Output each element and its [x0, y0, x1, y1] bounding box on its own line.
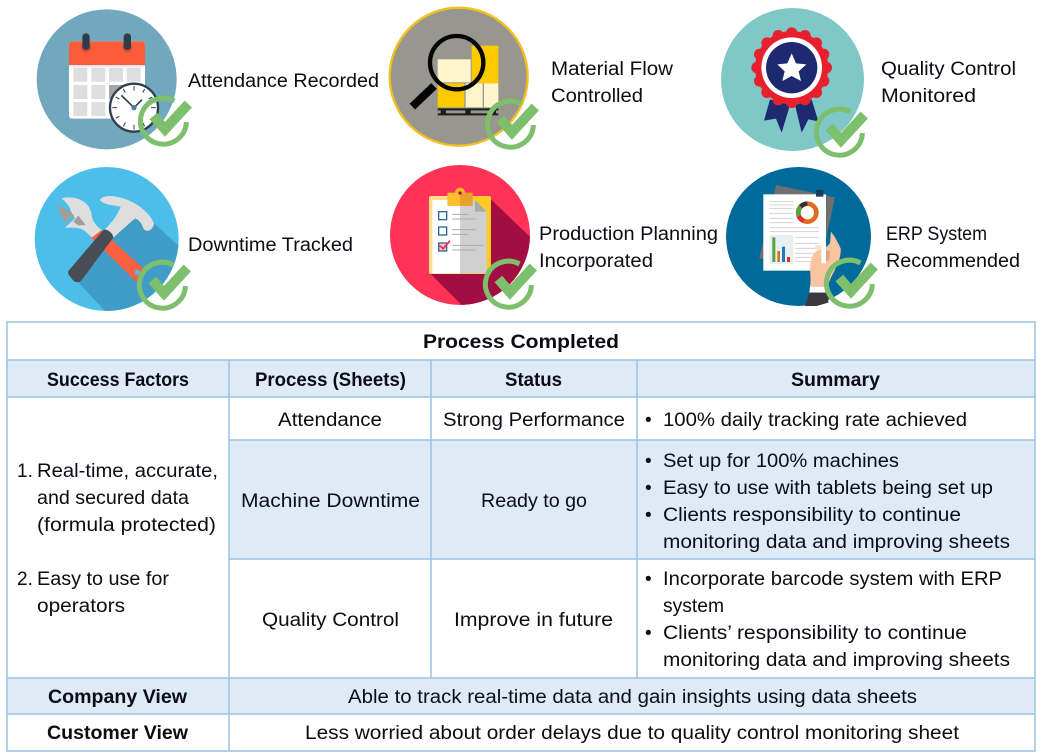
- icon: check mark material: [487, 101, 535, 147]
- label: material flow controlled: [551, 59, 673, 107]
- row: attendance: Attendance: [278, 410, 382, 431]
- row: machine downtime: •: [645, 451, 652, 472]
- row: attendance: 100% daily tracking rate achieved: [663, 410, 967, 431]
- table title: Process Completed: [423, 332, 619, 353]
- row: customer view: Less worried about order delays due to quality control monitoring sheet: [305, 723, 960, 744]
- success factors list: and secured data: [37, 488, 189, 509]
- label: production planning incorporated: [539, 224, 718, 272]
- row: customer view: [47, 723, 960, 744]
- icon: check mark quality: [816, 109, 864, 155]
- success factors list: [17, 461, 218, 617]
- table column headers: Process (Sheets): [255, 370, 406, 391]
- row: machine downtime: [241, 451, 1010, 553]
- label: production planning incorporated: Incorporated: [539, 251, 653, 272]
- row: attendance: [278, 410, 967, 431]
- row: machine downtime: monitoring data and improving sheets: [663, 532, 1010, 553]
- row: quality control: •: [645, 569, 652, 590]
- label: downtime tracked: Downtime Tracked: [188, 235, 353, 256]
- success factors list: 2.: [17, 569, 33, 590]
- success factors list: operators: [37, 596, 125, 617]
- row: quality control: monitoring data and improving sheets: [663, 650, 1010, 671]
- row: machine downtime: Set up for 100% machines: [663, 451, 899, 472]
- label: ERP system recommended: ERP System: [886, 224, 987, 245]
- row: quality control: Quality Control: [262, 610, 399, 631]
- row: quality control: •: [645, 623, 652, 644]
- row: company view: Able to track real-time data and gain insights using data sheets: [348, 687, 917, 708]
- row: quality control: Incorporate barcode system with ERP: [663, 569, 1002, 590]
- icon: attendance calendar and clock: [37, 9, 177, 149]
- row: machine downtime: Machine Downtime: [241, 491, 420, 512]
- row: attendance: •: [645, 410, 652, 431]
- success factors list: Real-time, accurate,: [37, 461, 218, 482]
- row: quality control: Improve in future: [454, 610, 613, 631]
- row: company view: Company View: [48, 687, 187, 708]
- icon: quality rosette: [721, 8, 864, 151]
- label: quality control monitored: [881, 59, 1016, 107]
- label: quality control monitored: Monitored: [881, 86, 976, 107]
- label: attendance recorded: Attendance Recorded: [188, 71, 379, 92]
- table column headers: Success Factors: [47, 370, 189, 391]
- label: quality control monitored: Quality Control: [881, 59, 1016, 80]
- row: machine downtime: •: [645, 505, 652, 526]
- row: attendance: Strong Performance: [443, 410, 625, 431]
- icon: check mark downtime: [139, 262, 187, 308]
- row: quality control: [262, 569, 1010, 671]
- icon: material flow boxes and magnifier: [390, 8, 528, 146]
- row: machine downtime: •: [645, 478, 652, 499]
- row: customer view: Customer View: [47, 723, 188, 744]
- row: machine downtime: Ready to go: [481, 491, 587, 512]
- icon: check mark attendance: [140, 98, 188, 144]
- icon: production planning clipboard: [390, 165, 537, 310]
- label: material flow controlled: Material Flow: [551, 59, 673, 80]
- row: quality control: Clients’ responsibility to continue: [663, 623, 967, 644]
- table column headers: [47, 370, 880, 391]
- table: process completed: [7, 322, 1035, 751]
- icon: downtime wrench and hammer: [34, 167, 179, 311]
- icon: check mark ERP: [826, 260, 874, 306]
- table column headers: Summary: [791, 370, 880, 391]
- row: machine downtime: Clients responsibility to continue: [663, 505, 961, 526]
- table column headers: Status: [505, 370, 562, 391]
- icon: ERP report in hand: [726, 167, 871, 306]
- success factors list: 1.: [17, 461, 33, 482]
- success factors list: Easy to use for: [37, 569, 170, 590]
- success factors list: (formula protected): [37, 515, 216, 536]
- row: company view: [48, 687, 917, 708]
- label: ERP system recommended: [886, 224, 1020, 272]
- label: ERP system recommended: Recommended: [886, 251, 1020, 272]
- icon: check mark production: [485, 261, 533, 307]
- row: quality control: system: [663, 596, 724, 617]
- row: machine downtime: Easy to use with tablets being set up: [663, 478, 993, 499]
- label: material flow controlled: Controlled: [551, 86, 643, 107]
- label: production planning incorporated: Production Planning: [539, 224, 718, 245]
